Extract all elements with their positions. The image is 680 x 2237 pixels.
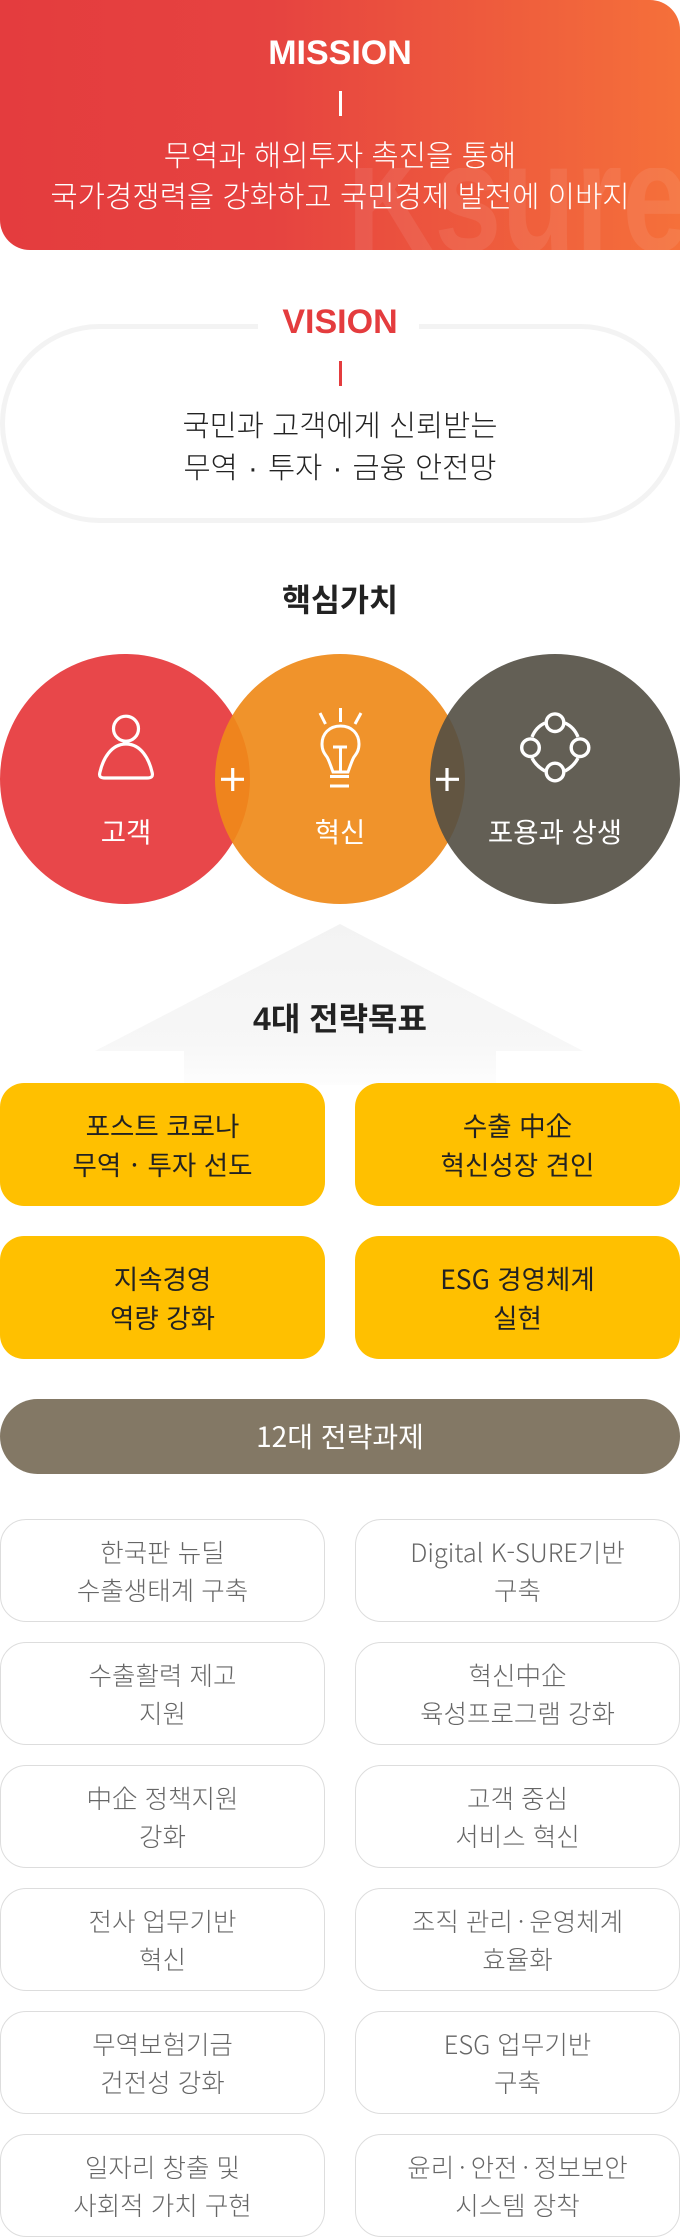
vision divider [339,361,342,386]
mission heading: MISSION [268,34,412,72]
vision statement [183,410,497,485]
goal 3: 지속경영 [114,1258,211,1296]
task 5: 中企 정책지원 [86,1778,238,1816]
circle: inclusion [430,654,680,904]
task 8 [355,1888,680,1991]
plus sign left [221,768,244,791]
task 8: 효율화 [482,1940,553,1976]
circle: customer [0,654,250,904]
task 11: 일자리 창출 및 [85,2148,240,2184]
task 5: 강화 [139,1816,186,1854]
banner: twelve strategic tasks [0,1399,680,1474]
task 2: 구축 [494,1570,541,1608]
vision heading: VISION [282,303,398,341]
circle: innovation [215,654,465,904]
task 4 [355,1642,680,1745]
task 12: 윤리·안전·정보보안 [407,2148,628,2184]
goal 1: 포스트 코로나 [86,1104,239,1144]
mission divider [339,91,342,116]
vision rounded outline [0,324,680,523]
label: inclusion and coexistence: 포용과 상생 [488,816,622,848]
task 9: 건전성 강화 [100,2062,225,2100]
goal 2: 혁신성장 견인 [441,1144,594,1182]
task 1 [0,1519,325,1622]
task 3 [0,1642,325,1745]
goal 4: ESG 경영체계 [440,1258,595,1296]
task 12: 시스템 장착 [455,2186,580,2222]
task 7: 혁신 [139,1940,186,1976]
task 11: 사회적 가치 구현 [73,2186,252,2222]
task 1: 수출생태계 구축 [77,1570,248,1608]
icon: light bulb [320,708,361,786]
mission statement [50,140,630,214]
task 3: 지원 [139,1694,186,1730]
task 10: ESG 업무기반 [444,2024,591,2062]
chart: core values venn circles [0,654,680,904]
panel: four strategic goals [0,1083,680,1359]
task 4: 육성프로그램 강화 [420,1694,615,1730]
goal 4: 실현 [493,1296,542,1336]
task 9: 무역보험기금 [92,2024,233,2062]
mission statement: 국가경쟁력을 강화하고 국민경제 발전에 이바지 [50,181,630,214]
vision statement: 무역 · 투자 · 금융 안전망 [184,452,496,485]
task 8: 조직 관리·운영체계 [412,1902,623,1938]
label: customer: 고객 [101,816,151,848]
task 1: 한국판 뉴딜 [100,1532,225,1570]
arrow: upward background [112,924,568,1044]
goal 3: 역량 강화 [110,1296,215,1336]
task 5 [0,1765,325,1868]
task 11 [0,2134,325,2237]
task 7 [0,1888,325,1991]
icon: person [100,716,152,778]
mission background [0,0,680,250]
goal 4 [355,1236,680,1359]
task 6 [355,1765,680,1868]
goal 3 [0,1236,325,1359]
panel: twelve strategic tasks [0,1519,680,2237]
goal 2 [355,1083,680,1206]
task 2 [355,1519,680,1622]
task 6: 서비스 혁신 [455,1816,580,1854]
panel: vision [0,303,680,523]
task 3: 수출활력 제고 [89,1656,236,1692]
label: innovation: 혁신 [315,816,365,848]
heading: core values: 핵심가치 [282,582,398,618]
banner: twelve strategic tasks: 12대 전략과제 [256,1416,424,1456]
task 10 [355,2011,680,2114]
task 9 [0,2011,325,2114]
panel: mission [0,0,680,250]
task 4: 혁신中企 [469,1656,566,1692]
icon: connected nodes [522,714,589,781]
task 6: 고객 중심 [467,1778,568,1816]
goal 2: 수출 中企 [463,1104,572,1144]
plus sign right [436,768,459,791]
task 10: 구축 [494,2062,541,2100]
goal 1 [0,1083,325,1206]
vision statement: 국민과 고객에게 신뢰받는 [183,410,497,442]
mission statement: 무역과 해외투자 촉진을 통해 [164,140,516,172]
heading: four strategic goals: 4대 전략목표 [253,1001,427,1037]
goal 1: 무역 · 투자 선도 [73,1144,252,1182]
task 2: Digital K-SURE기반 [410,1532,625,1570]
task 12 [355,2134,680,2237]
task 7: 전사 업무기반 [89,1902,236,1938]
